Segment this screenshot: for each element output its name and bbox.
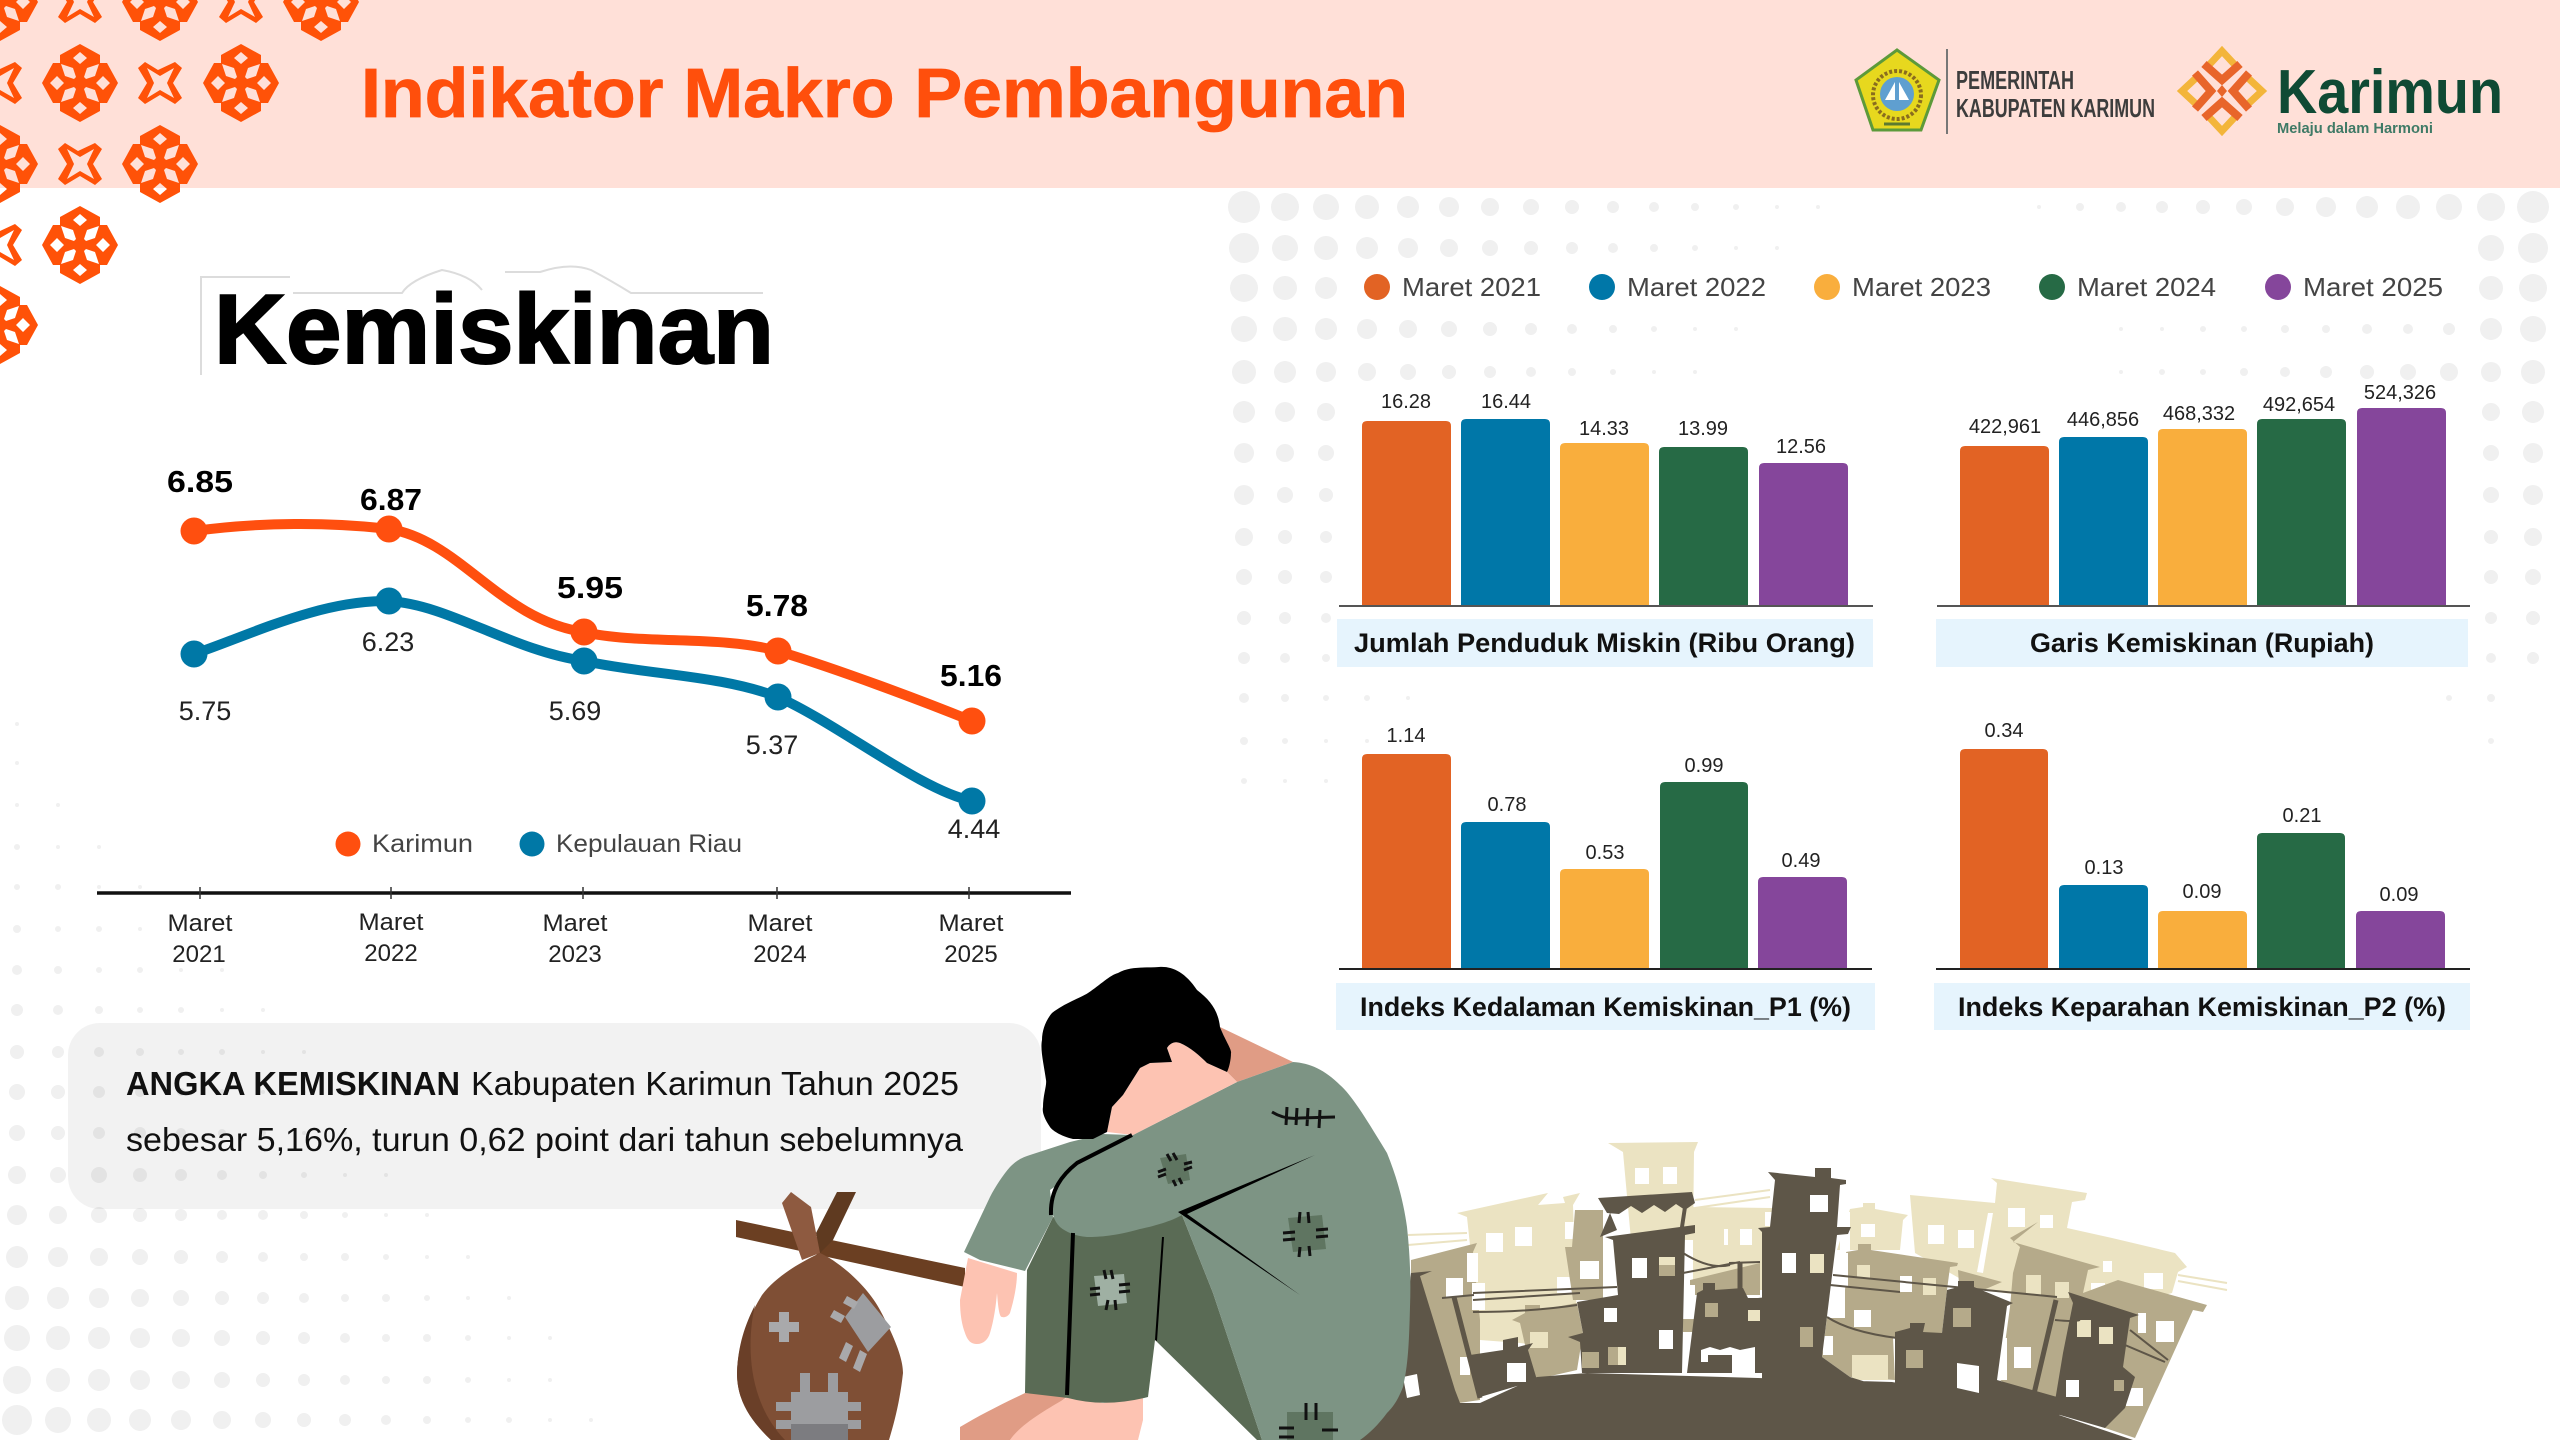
- bar chart: Garis Kemiskinan: Garis Kemiskinan (Rupiah): [2030, 628, 2374, 658]
- line chart axis: 2022: [364, 940, 418, 967]
- face: [1107, 1042, 1237, 1135]
- bar chart: Garis Kemiskinan: [1936, 382, 2470, 667]
- series: Kepulauan Riau: 5.37: [746, 730, 798, 760]
- logo: Karimun Melaju dalam Harmoni: [2182, 51, 2503, 137]
- line chart axis: 2024: [753, 941, 807, 968]
- bar legend: [1364, 272, 2443, 302]
- callout: poverty rate summary: Kabupaten Karimun Tahun 2025: [471, 1065, 959, 1102]
- bar chart: Indeks Keparahan: 0.09: [2183, 881, 2221, 903]
- sleeve: [964, 1134, 1130, 1271]
- bar chart: Jumlah Penduduk Miskin: 16.28: [1381, 391, 1431, 413]
- bar chart: Indeks Kedalaman: 0.78: [1488, 794, 1526, 816]
- bar chart: Indeks Kedalaman: Indeks Kedalaman Kemiskinan_P1 (%): [1360, 992, 1851, 1022]
- dot pattern: bottom left: [17, 724, 591, 1420]
- logo: Pemerintah Kabupaten Karimun: PEMERINTAH: [1956, 65, 2074, 95]
- bar chart: Indeks Kedalaman: [1336, 725, 1875, 1030]
- line chart axis: Maret: [358, 909, 424, 936]
- bar chart: Indeks Keparahan: 0.09: [2380, 884, 2418, 906]
- feet: [960, 1393, 1068, 1440]
- bar chart: Jumlah Penduduk Miskin: 12.56: [1776, 436, 1826, 458]
- dot pattern: top right: [1244, 207, 2533, 781]
- far wires: [1408, 1190, 2227, 1290]
- header band: [0, 0, 2560, 188]
- batik ornament pattern: [0, 0, 359, 364]
- bar legend: Maret 2024: [2077, 272, 2216, 302]
- line chart axis: 2025: [944, 941, 998, 968]
- line chart axis: Maret: [168, 910, 233, 937]
- series: Kepulauan Riau: 5.69: [549, 696, 601, 726]
- line chart legend: [336, 830, 742, 858]
- line chart: Karimun vs Kepulauan Riau: [97, 464, 1071, 968]
- bar chart: Garis Kemiskinan: 422,961: [1969, 416, 2041, 438]
- line chart axis: Maret: [938, 910, 1004, 937]
- far buildings: [1457, 1142, 2187, 1350]
- bar chart: Indeks Keparahan: Indeks Keparahan Kemiskinan_P2 (%): [1958, 992, 2446, 1022]
- bar legend: Maret 2021: [1402, 272, 1541, 302]
- logo: Karimun Melaju dalam Harmoni: Melaju dalam Harmoni: [2277, 120, 2433, 137]
- line chart axis: [97, 887, 1071, 968]
- series: Karimun: [167, 464, 1002, 734]
- fabric creases: [1051, 1135, 1132, 1395]
- title: Indikator Makro Pembangunan: [361, 54, 1408, 132]
- bar chart: Jumlah Penduduk Miskin: [1337, 391, 1873, 667]
- mid buildings: [1411, 1210, 2207, 1438]
- callout: poverty rate summary: ANGKA KEMISKINAN: [126, 1065, 460, 1102]
- bar chart: Jumlah Penduduk Miskin: 14.33: [1579, 418, 1629, 440]
- bar legend: Maret 2022: [1627, 272, 1766, 302]
- line chart axis: 2021: [172, 941, 226, 968]
- bar chart: Indeks Keparahan: 0.13: [2085, 857, 2123, 879]
- pants: [1025, 1215, 1262, 1440]
- bar chart: Indeks Keparahan: 0.21: [2283, 805, 2321, 827]
- bar chart: Indeks Keparahan: 0.34: [1985, 720, 2023, 742]
- series: Karimun: 5.95: [557, 570, 623, 605]
- bar chart: Garis Kemiskinan: 446,856: [2067, 409, 2139, 431]
- dark buildings: [1340, 1168, 2139, 1440]
- bar chart: Jumlah Penduduk Miskin: 13.99: [1678, 418, 1728, 440]
- bar legend: Maret 2025: [2303, 272, 2443, 302]
- series: Karimun: 6.85: [167, 464, 233, 499]
- mid windows: [1446, 1253, 2174, 1406]
- series: Karimun: 5.78: [746, 588, 808, 623]
- patches and stitches: [1160, 1154, 1333, 1440]
- logo: Pemerintah Kabupaten Karimun: KABUPATEN KARIMUN: [1956, 93, 2155, 123]
- bar chart: Indeks Keparahan: [1934, 720, 2470, 1030]
- bar chart: Indeks Kedalaman: 1.14: [1387, 725, 1425, 747]
- illustration: slum skyline: [1340, 1142, 2227, 1440]
- dark windows: [1403, 1195, 2079, 1398]
- far windows: [1486, 1167, 2163, 1293]
- bar chart: Indeks Kedalaman: 0.53: [1586, 842, 1624, 864]
- bar chart: Garis Kemiskinan: 524,326: [2364, 382, 2436, 404]
- line chart legend: Kepulauan Riau: [556, 830, 742, 858]
- series: Karimun: 6.87: [360, 482, 422, 517]
- logo: Karimun Melaju dalam Harmoni: Karimun: [2277, 58, 2503, 127]
- series: Kepulauan Riau: 5.75: [179, 696, 231, 726]
- bar chart: Garis Kemiskinan: 468,332: [2163, 403, 2235, 425]
- series: Kepulauan Riau: [179, 588, 1000, 844]
- illustration: bag on stick: [736, 1192, 965, 1440]
- line chart axis: Maret: [748, 910, 813, 937]
- logo: Pemerintah Kabupaten Karimun: [1856, 49, 2155, 134]
- line chart axis: Maret: [542, 910, 608, 937]
- hair: [1041, 967, 1231, 1139]
- series: Kepulauan Riau: 4.44: [948, 814, 1000, 844]
- bar chart: Jumlah Penduduk Miskin: Jumlah Penduduk Miskin (Ribu Orang): [1354, 628, 1855, 658]
- bar legend: Maret 2023: [1852, 272, 1991, 302]
- line chart legend: Karimun: [372, 830, 473, 858]
- utility poles and wires: [1454, 1262, 2056, 1398]
- heading: Kemiskinan: Kemiskinan: [214, 274, 774, 384]
- illustration: sad person: [960, 967, 1410, 1440]
- series: Kepulauan Riau: 6.23: [362, 627, 414, 657]
- bar chart: Garis Kemiskinan: 492,654: [2263, 394, 2335, 416]
- line chart axis: 2023: [548, 941, 602, 968]
- bar chart: Indeks Kedalaman: 0.99: [1685, 755, 1723, 777]
- hand: [960, 1258, 1017, 1344]
- bar chart: Indeks Kedalaman: 0.49: [1782, 850, 1820, 872]
- callout: poverty rate summary: sebesar 5,16%, turun 0,62 point dari tahun sebelumnya: [126, 1121, 964, 1158]
- neck: [1220, 1027, 1293, 1082]
- back and arm: [1052, 1062, 1410, 1440]
- series: Karimun: 5.16: [940, 658, 1002, 693]
- bar chart: Jumlah Penduduk Miskin: 16.44: [1481, 391, 1531, 413]
- callout: poverty rate summary: [68, 1023, 1041, 1209]
